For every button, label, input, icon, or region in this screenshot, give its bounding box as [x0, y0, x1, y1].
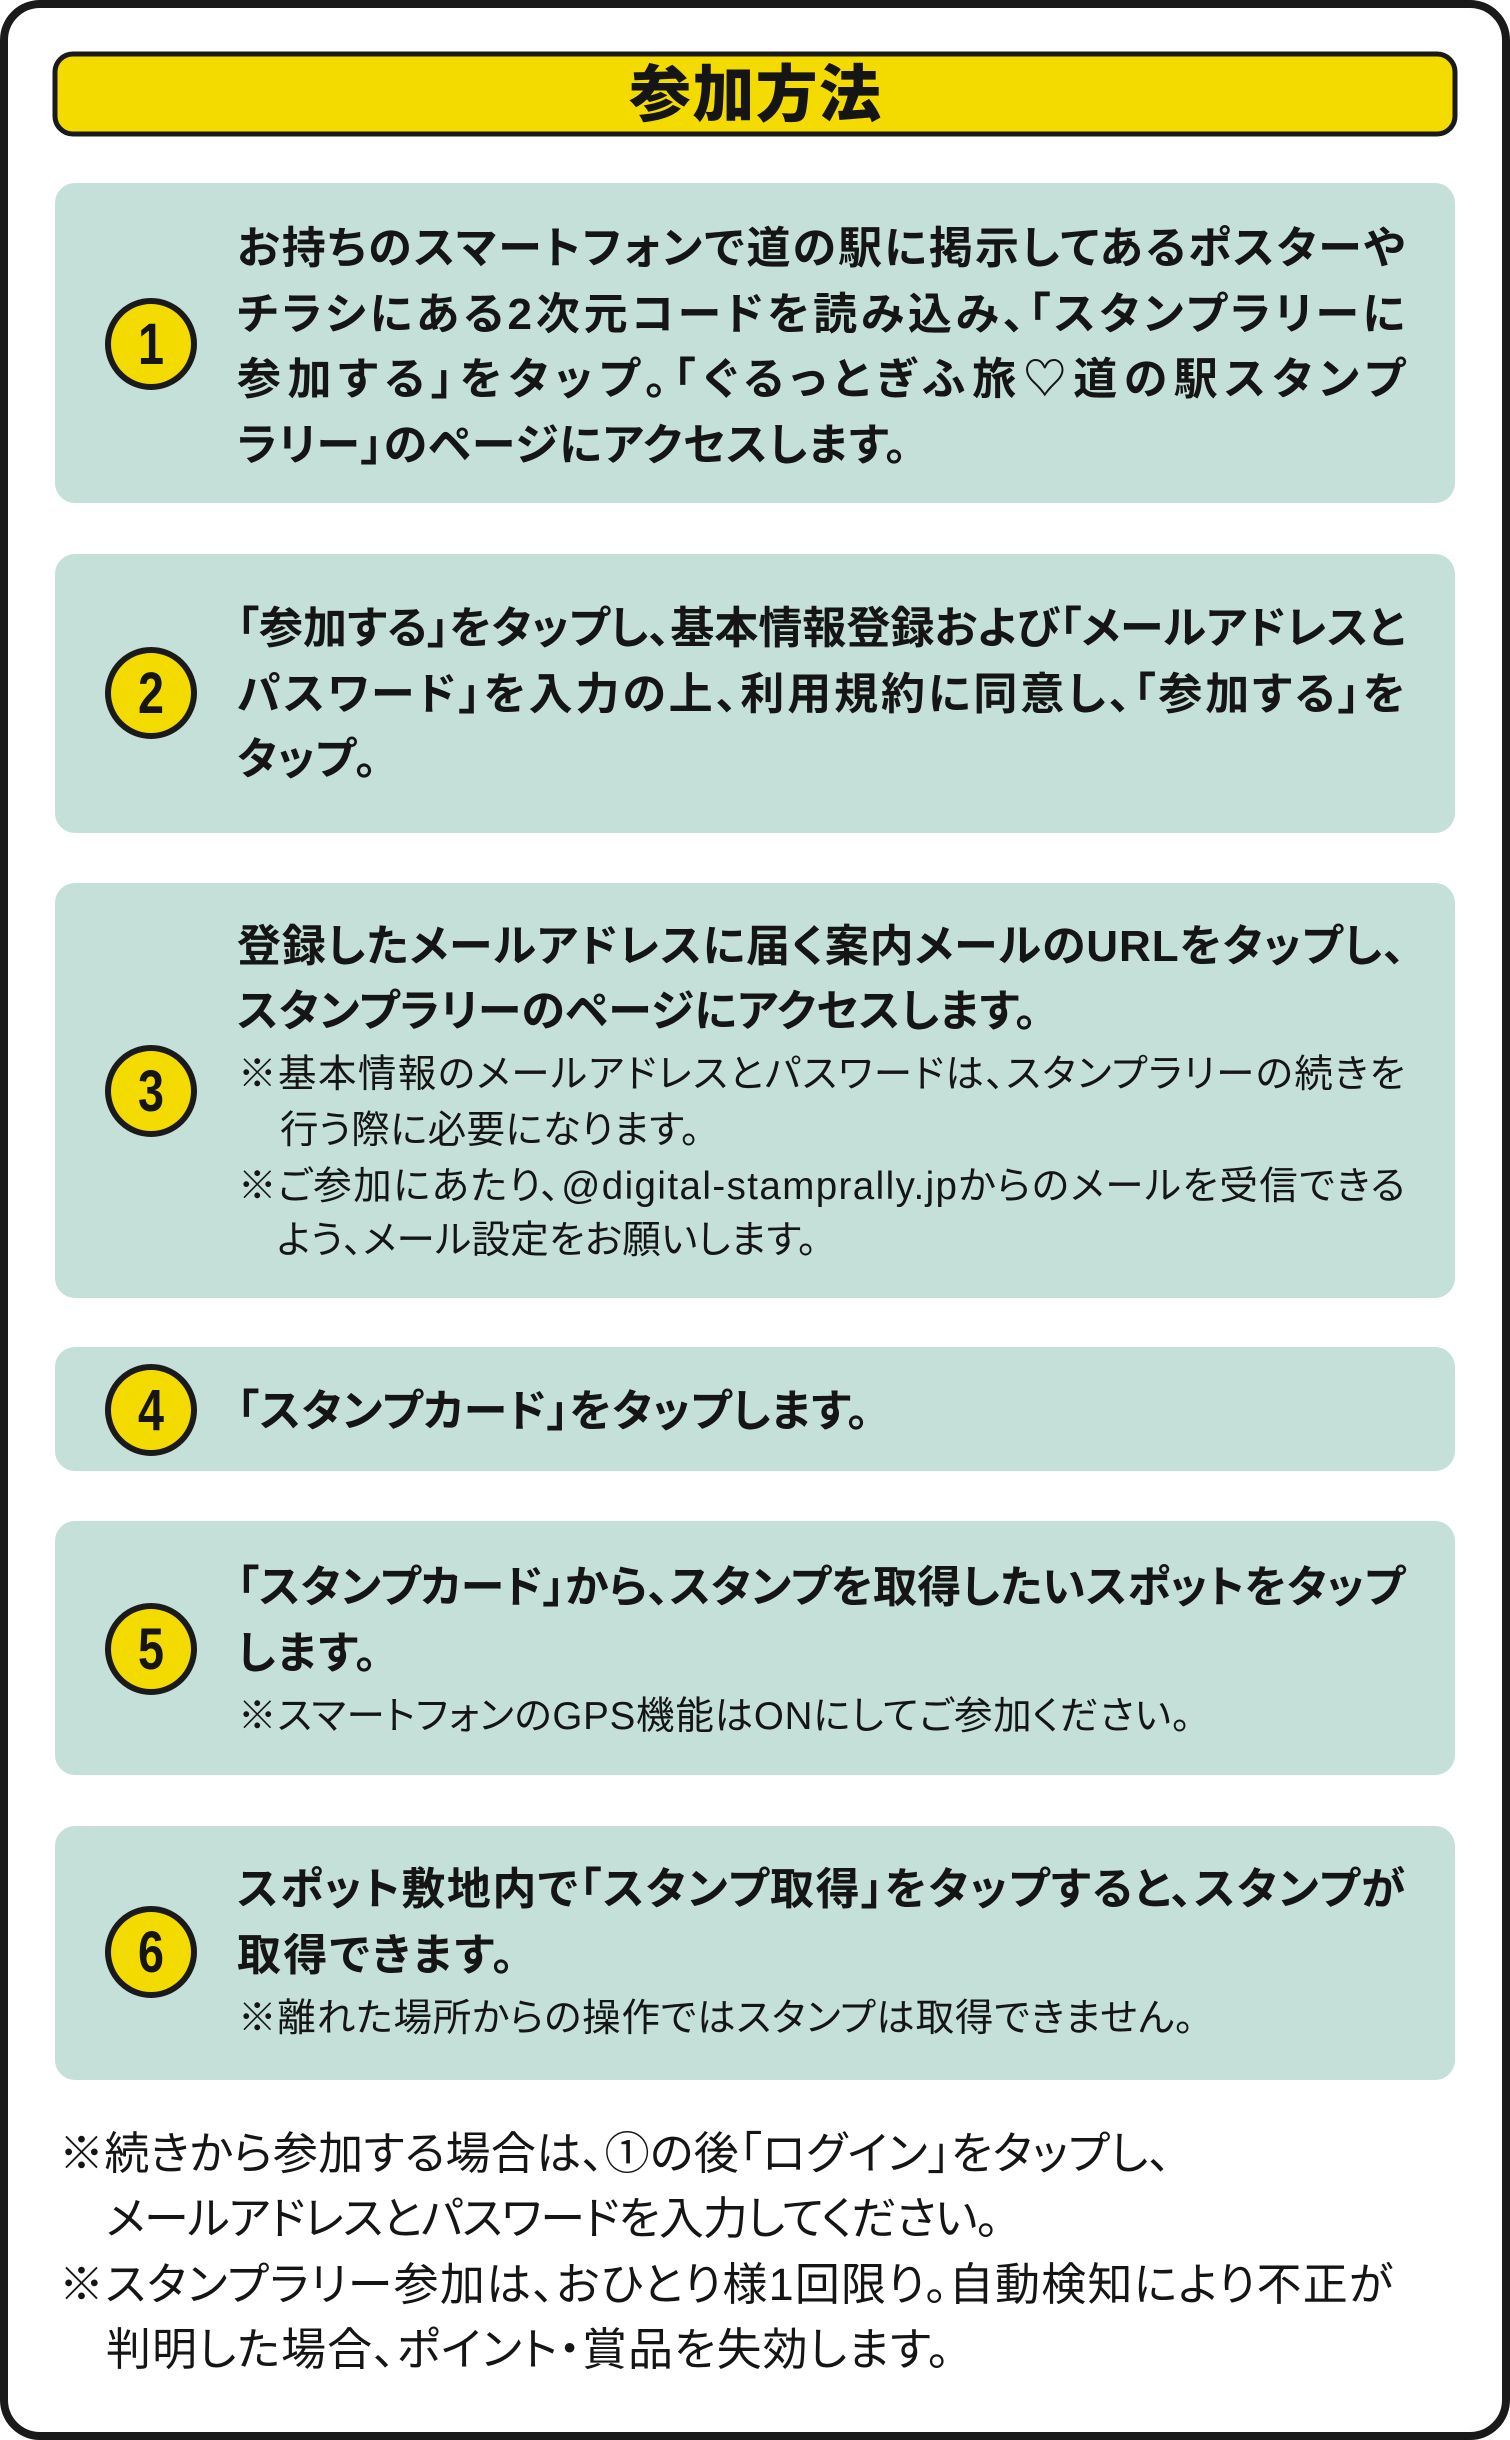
title: 参加方法 — [629, 61, 881, 130]
step 6 background — [55, 1826, 1455, 2080]
step 1 text: お持ちのスマートフォンで道の駅に掲示してあるポスターや — [237, 224, 1405, 273]
step 6 main text — [237, 1865, 1405, 1980]
step 2 text: 「参加する」をタップし、基本情報登録および「メールアドレスと — [237, 604, 1405, 653]
step 5 number badge — [108, 1606, 194, 1692]
title bar — [55, 54, 1455, 134]
step 3 number badge — [108, 1048, 194, 1134]
step 6 note: ※離れた場所からの操作ではスタンプは取得できません。 — [238, 1997, 1194, 2040]
step 3 number badge: 3 — [138, 1059, 164, 1124]
step 6 main text: 取得できます。 — [237, 1931, 514, 1980]
step 1 text — [237, 224, 1407, 470]
step 3 main text: スタンプラリーのページにアクセスします。 — [237, 987, 1037, 1036]
step 3 notes — [238, 1053, 1405, 1262]
step 5 main text: します。 — [237, 1629, 377, 1678]
step 5 number badge: 5 — [138, 1617, 164, 1682]
panel: step 6 — [55, 1826, 1455, 2080]
step 2 number badge — [108, 650, 194, 736]
step 4 background — [55, 1347, 1455, 1471]
panel: step 4 — [55, 1347, 1455, 1471]
panel: step 3 — [55, 883, 1455, 1298]
step 5 main text — [237, 1563, 1407, 1678]
step 4 number badge — [108, 1367, 194, 1453]
step 3 notes: よう、メール設定をお願いします。 — [277, 1219, 817, 1262]
step 5 note: ※スマートフォンのGPS機能はONにしてご参加ください。 — [238, 1695, 1191, 1738]
step 2 number badge: 2 — [138, 661, 164, 726]
panel: step 5 — [55, 1521, 1455, 1775]
step 6 number badge — [108, 1909, 194, 1995]
footer notes: メールアドレスとパスワードを入力してください。 — [106, 2193, 999, 2244]
step 5 background — [55, 1521, 1455, 1775]
footer notes: 判明した場合、ポイント・賞品を失効します。 — [106, 2324, 950, 2375]
step 2 text: パスワード」を入力の上、利用規約に同意し、「参加する」を — [237, 670, 1405, 719]
panel: step 2 — [55, 554, 1455, 833]
title background — [55, 54, 1455, 134]
step 4 number badge: 4 — [138, 1378, 164, 1443]
step 3 main text: 登録したメールアドレスに届く案内メールのURLをタップし、 — [237, 922, 1405, 971]
step 2 background — [55, 554, 1455, 833]
step 1 text: 参加する」をタップ。「ぐるっとぎふ旅♡道の駅スタンプ — [237, 355, 1407, 404]
step 2 text — [237, 604, 1405, 784]
step 3 notes: 行う際に必要になります。 — [280, 1109, 700, 1152]
step 2 text: タップ。 — [237, 735, 377, 784]
step 1 number badge — [108, 301, 194, 387]
step 3 notes: ※基本情報のメールアドレスとパスワードは、スタンプラリーの続きを — [238, 1053, 1405, 1096]
step 1 text: チラシにある2次元コードを読み込み、「スタンプラリーに — [237, 290, 1405, 339]
step 6 main text: スポット敷地内で「スタンプ取得」をタップすると、スタンプが — [237, 1865, 1405, 1914]
footer notes: ※続きから参加する場合は、①の後「ログイン」をタップし、 — [59, 2128, 1171, 2179]
panel: step 1 — [55, 183, 1455, 503]
step 3 main text — [237, 922, 1405, 1036]
step 6 number badge: 6 — [138, 1920, 164, 1985]
step 3 background — [55, 883, 1455, 1298]
footer notes: ※スタンプラリー参加は、おひとり様1回限り。自動検知により不正が — [59, 2259, 1393, 2310]
step 1 number badge: 1 — [138, 312, 164, 377]
step 5 main text: 「スタンプカード」から、スタンプを取得したいスポットをタップ — [237, 1563, 1407, 1612]
footer notes — [59, 2128, 1393, 2375]
step 3 notes: ※ご参加にあたり、@digital-stamprally.jpからのメールを受信できる — [238, 1165, 1405, 1208]
step 4 text: 「スタンプカード」をタップします。 — [237, 1387, 869, 1436]
step 1 text: ラリー」のページにアクセスします。 — [237, 421, 907, 470]
step 1 background — [55, 183, 1455, 503]
